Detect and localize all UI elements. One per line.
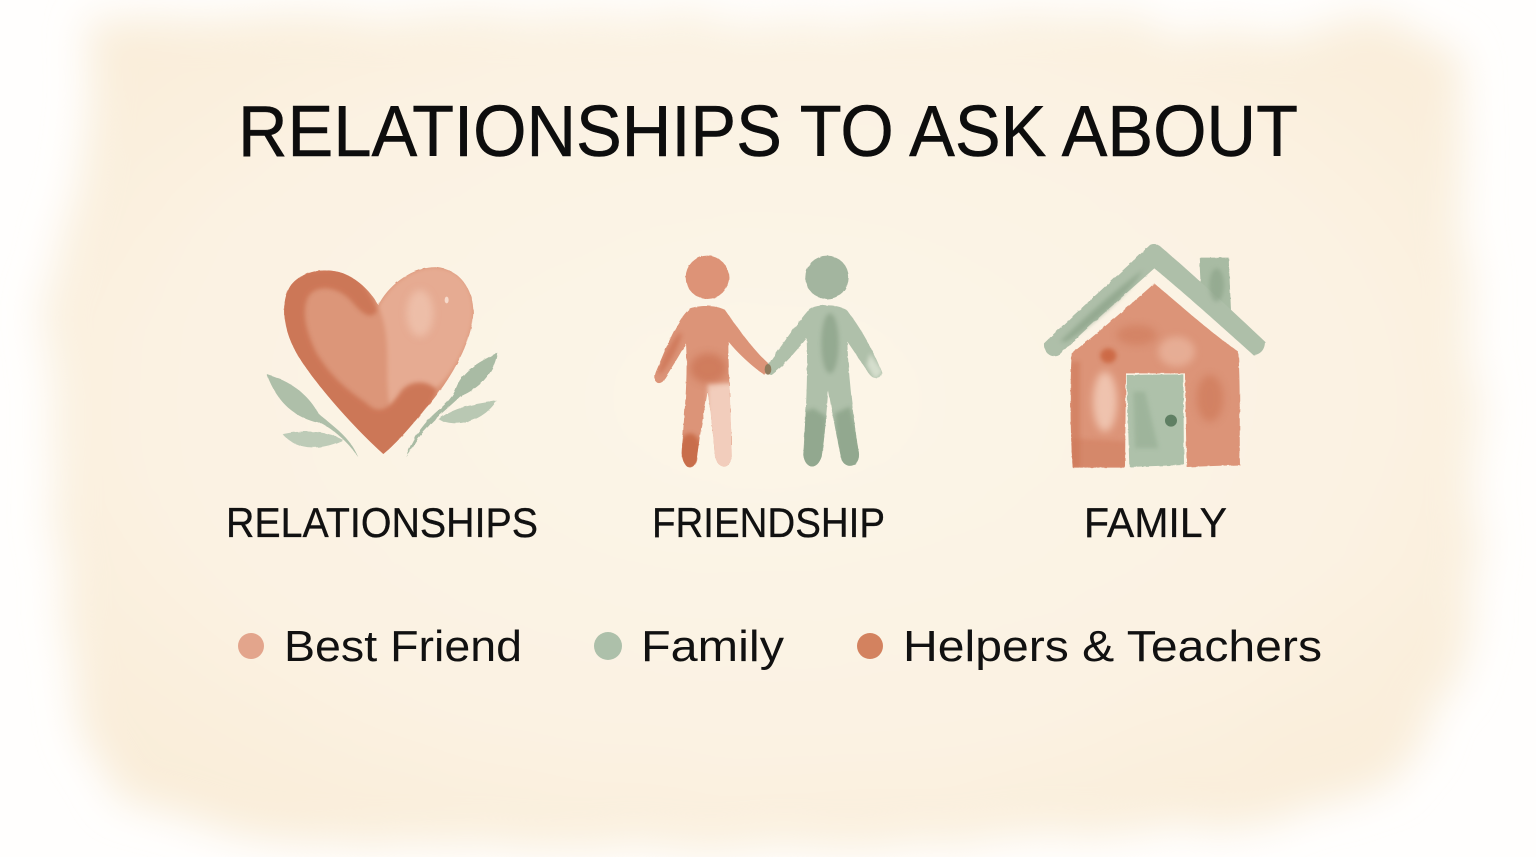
person: terracotta: [655, 256, 769, 473]
heart body: [284, 267, 473, 454]
legend: family: [594, 622, 784, 671]
label: family: FAMILY: [1084, 499, 1227, 546]
legend: family: Family: [641, 622, 784, 671]
legend: best friend: Best Friend: [284, 622, 522, 671]
door knob: [1165, 415, 1177, 427]
door: [1127, 374, 1184, 467]
roof and chimney: [1044, 244, 1265, 356]
legend: helpers and teachers: Helpers & Teachers: [903, 622, 1322, 671]
clasped hands: [765, 364, 771, 375]
icon: two people holding hands: [655, 256, 883, 473]
house wall: [1071, 283, 1240, 468]
label: friendship: FRIENDSHIP: [652, 499, 885, 546]
icon: house: [1044, 244, 1265, 468]
leaves: [267, 353, 497, 457]
person: sage green: [767, 256, 883, 473]
label: relationships: RELATIONSHIPS: [226, 499, 538, 546]
icon: heart with leaves: [267, 267, 497, 460]
title: RELATIONSHIPS TO ASK ABOUT: [238, 92, 1298, 172]
